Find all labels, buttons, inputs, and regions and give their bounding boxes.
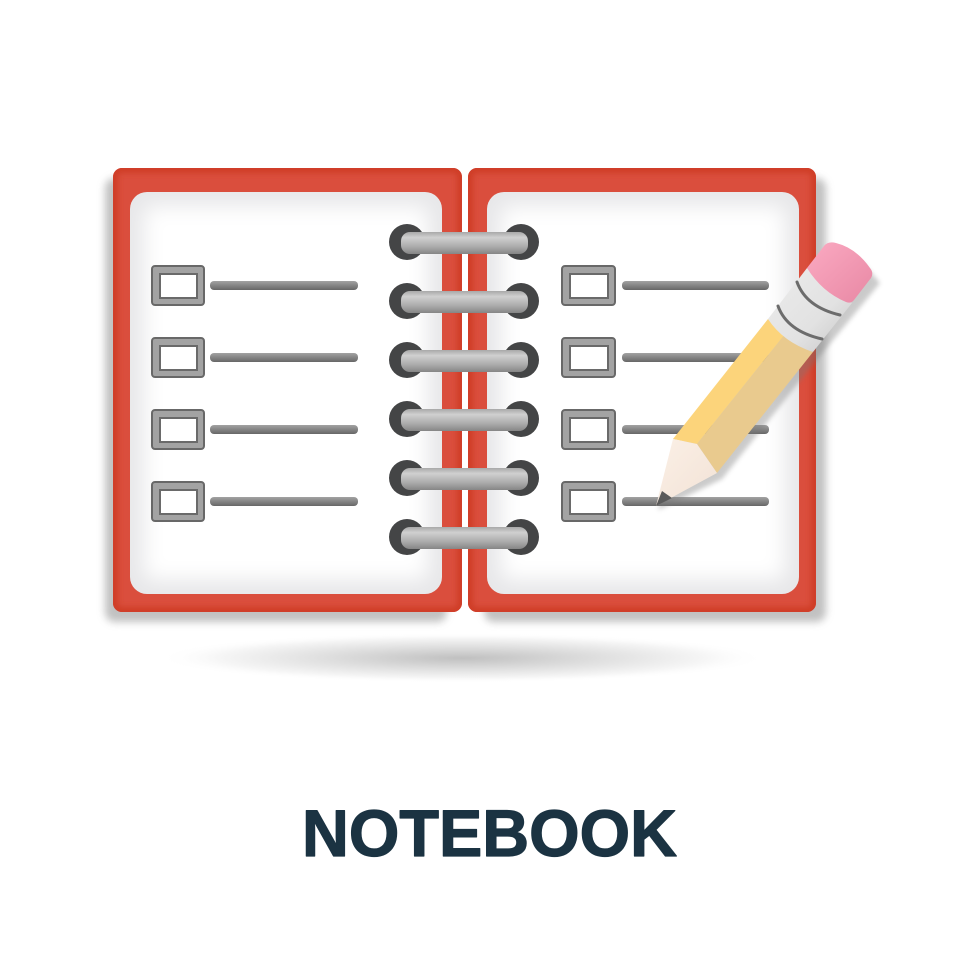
pencil ferrule [768,268,852,352]
cover shadows [105,178,826,622]
right checklist [562,266,769,521]
notebook [105,168,826,622]
pencil wood tip [656,439,717,506]
pencil lead [656,491,672,506]
spiral rings [389,224,539,555]
left page [130,192,442,594]
pencil body dark facet [697,333,813,473]
pencil [656,242,880,510]
pencil shadow [658,262,880,510]
right cover [468,168,816,612]
left checklist [152,266,358,521]
floor shadow [157,633,767,683]
left cover [113,168,462,612]
right page [487,192,799,594]
pencil body light facet [673,319,786,444]
ferrule bands [778,282,840,339]
title: NOTEBOOK [302,796,677,870]
pencil eraser [807,242,872,303]
